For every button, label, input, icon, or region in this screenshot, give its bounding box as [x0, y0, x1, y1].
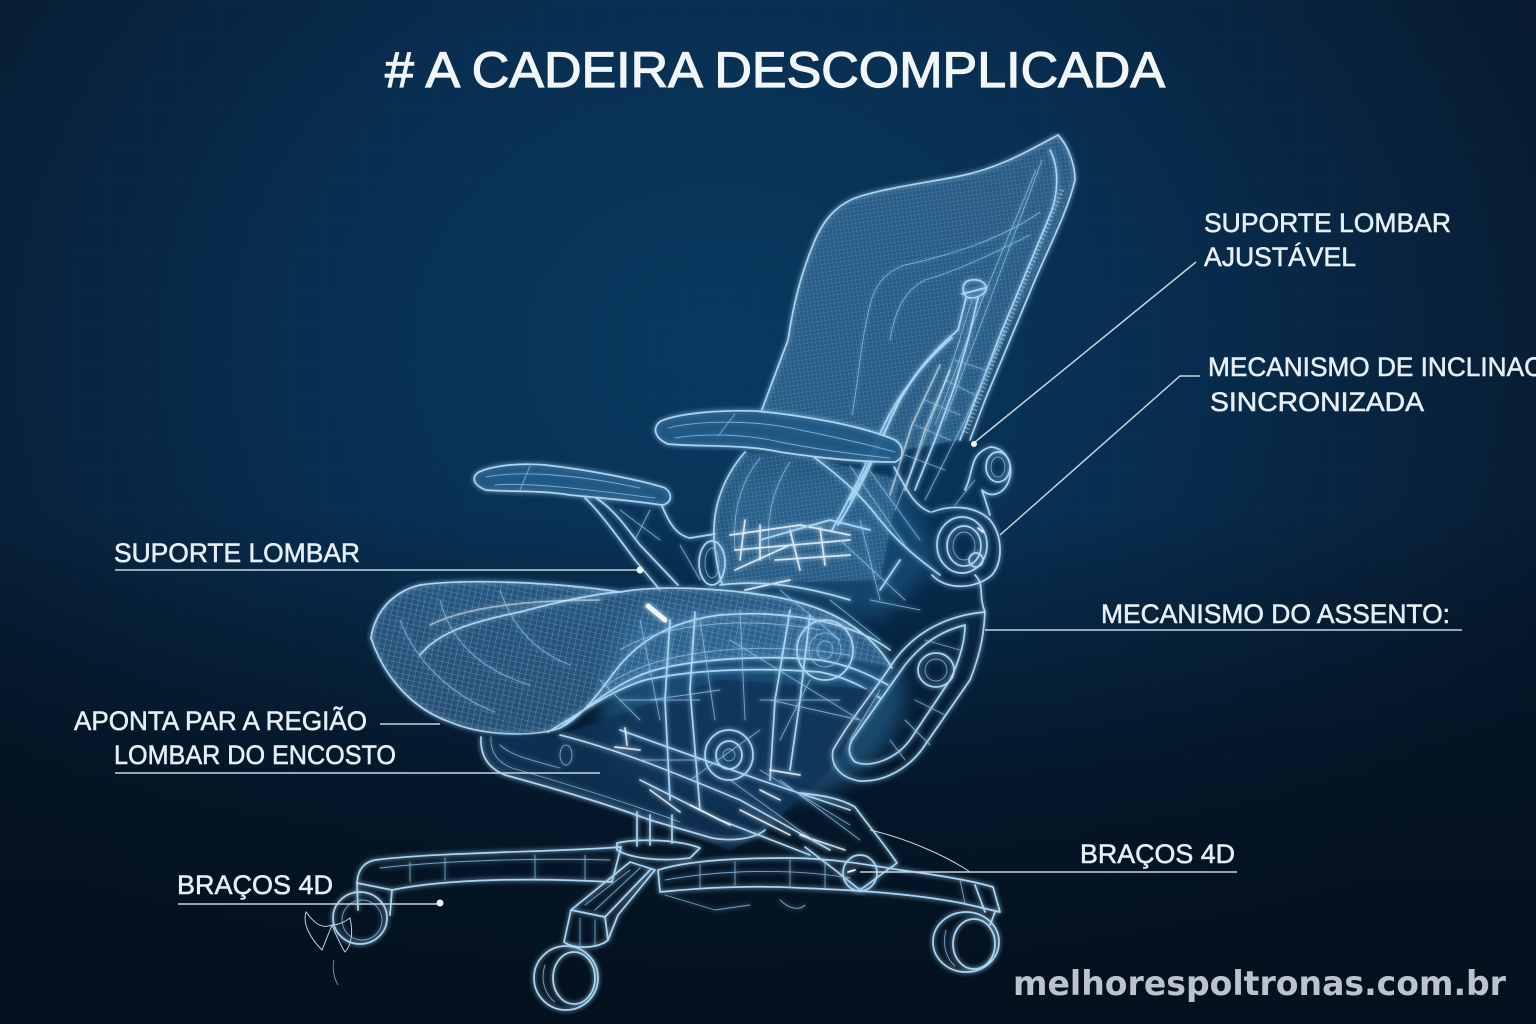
- casters: [333, 892, 999, 1010]
- callout: suporte lombar esquerda: SUPORTE LOMBAR: [114, 538, 360, 568]
- callout: bracos 4d direita: [860, 830, 1237, 872]
- callout: bracos 4d direita: BRAÇOS 4D: [1080, 839, 1235, 869]
- callout: mecanismo do assento: MECANISMO DO ASSENTO:: [1101, 599, 1450, 629]
- callout: suporte lombar esquerda: [114, 538, 644, 574]
- base: [357, 812, 1000, 947]
- callout: bracos 4d esquerda: BRAÇOS 4D: [177, 870, 333, 900]
- callout: mecanismo de inclinacao sincronizada: [1000, 352, 1536, 535]
- armrest: upper: [656, 411, 940, 575]
- callout: aponta para a regiao lombar do encosto: APONTA PAR A REGIÃO: [74, 705, 367, 736]
- title: # A CADEIRA DESCOMPLICADA: [385, 42, 1166, 98]
- callout: aponta para a regiao lombar do encosto: LOMBAR DO ENCOSTO: [114, 740, 396, 770]
- armrest: lower: [474, 464, 725, 590]
- chair soft luminous body: [603, 480, 940, 803]
- mechanism: [600, 520, 920, 891]
- spine frame: [832, 280, 1005, 530]
- backrest: [761, 135, 1075, 450]
- callout: bracos 4d esquerda: [177, 870, 444, 906]
- lumbar support shape: [714, 452, 900, 584]
- seat cushion: [371, 582, 892, 734]
- seat pan and bracket: [481, 575, 985, 850]
- callout: suporte lombar ajustavel: SUPORTE LOMBAR: [1204, 208, 1451, 238]
- watermark: melhorespoltronas.com.br: [1013, 964, 1506, 1004]
- callout: suporte lombar ajustavel: [971, 208, 1451, 447]
- icon: small scribble near left caster: [305, 912, 352, 985]
- chair wireframe: [333, 135, 1075, 1010]
- callout: suporte lombar ajustavel: AJUSTÁVEL: [1204, 242, 1356, 272]
- callout: mecanismo de inclinacao sincronizada: SINCRONIZADA: [1210, 387, 1424, 417]
- tilt hubs: [932, 447, 1011, 586]
- callout: aponta para a regiao lombar do encosto: [74, 705, 600, 773]
